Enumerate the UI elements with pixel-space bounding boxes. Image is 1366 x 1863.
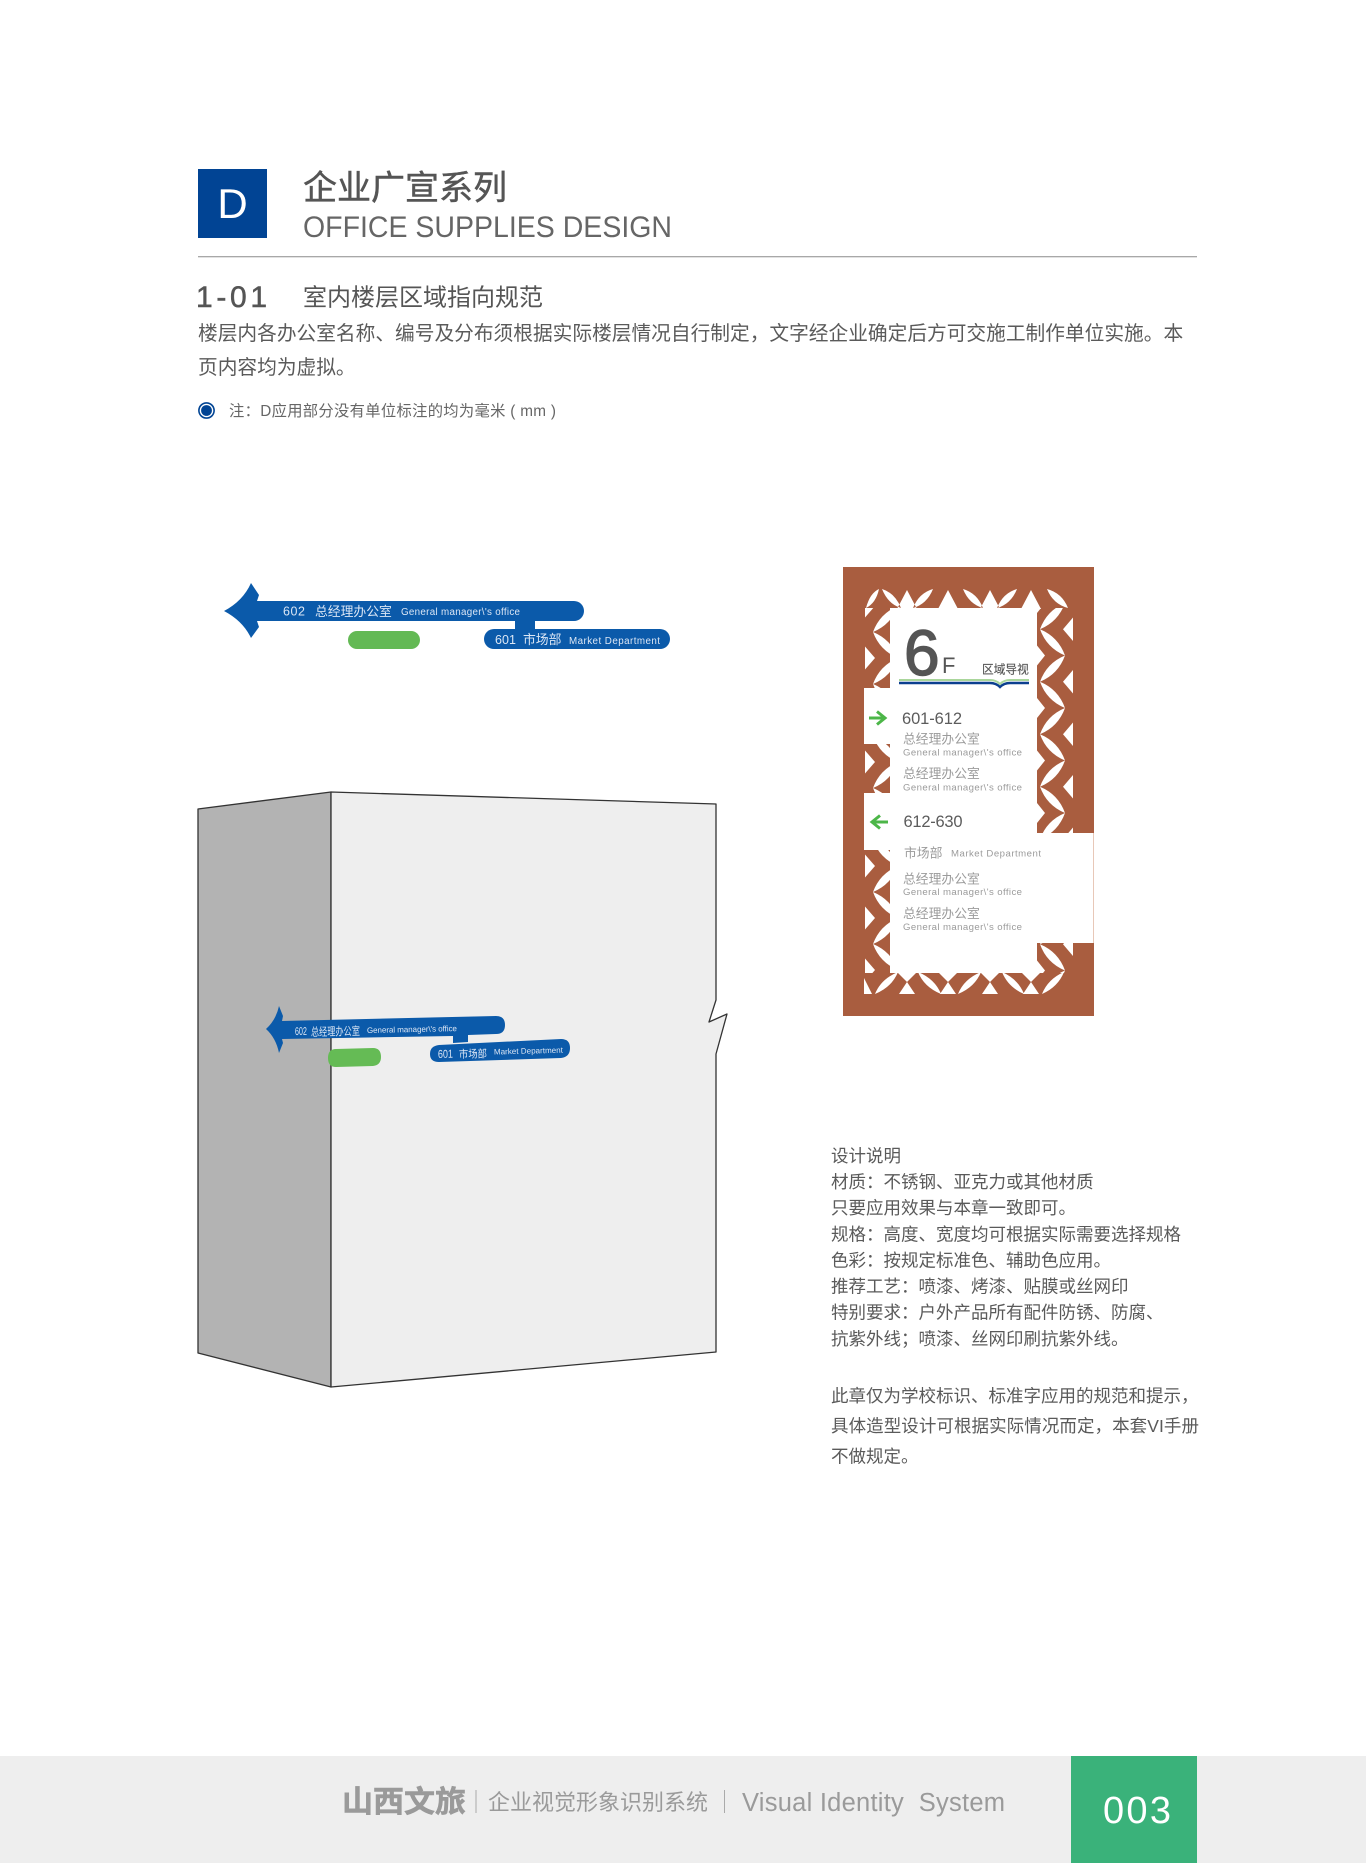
mounted labels: 市场部 <box>459 1046 487 1061</box>
description text: 页内容均为虚拟。 <box>198 357 356 379</box>
sign labels <box>283 604 660 647</box>
left and right cut-outs <box>864 688 1093 943</box>
sign labels: 601 <box>495 633 516 647</box>
floor number: 6 <box>904 617 940 689</box>
range 612-630: 612-630 <box>904 813 962 831</box>
sign labels: 市场部 <box>523 632 562 647</box>
room list upper: General manager\'s office <box>903 748 1022 758</box>
section badge D <box>198 169 267 238</box>
design notes: 特别要求：户外产品所有配件防锈、防腐、 <box>831 1302 1164 1322</box>
room list upper <box>903 732 1022 794</box>
footer band <box>0 1756 1366 1863</box>
mounted labels: 总经理办公室 <box>311 1024 360 1039</box>
section badge D: D <box>217 180 248 227</box>
design notes: 只要应用效果与本章一致即可。 <box>831 1198 1076 1218</box>
floor directory sign: F <box>942 653 955 678</box>
area guide label: 区域导视 <box>982 662 1029 676</box>
design notes: 抗紫外线；喷漆、丝网印刷抗紫外线。 <box>831 1329 1128 1349</box>
design notes: 材质：不锈钢、亚克力或其他材质 <box>831 1172 1094 1192</box>
directional sign: flat view <box>224 583 670 649</box>
mounted labels: 602 <box>295 1026 307 1038</box>
room list lower: 总经理办公室 <box>903 872 980 886</box>
room list upper: 总经理办公室 <box>903 766 980 781</box>
wall: left face <box>198 792 331 1387</box>
design notes <box>831 1146 1199 1466</box>
room list lower <box>903 846 1041 933</box>
sign frame <box>843 567 1094 1016</box>
heading: english title: OFFICE SUPPLIES DESIGN <box>303 211 672 244</box>
mounted arrow bar <box>266 1006 505 1053</box>
icon: green right arrow <box>869 712 885 724</box>
mounted labels <box>295 1024 564 1061</box>
design notes: 推荐工艺：喷漆、烤漆、贴膜或丝网印 <box>831 1276 1128 1296</box>
section title: 室内楼层区域指向规范 <box>303 284 543 312</box>
room list lower: Market Department <box>951 848 1041 860</box>
note with bullet: 注：D应用部分没有单位标注的均为毫米 ( mm ) <box>229 402 556 420</box>
room list lower: 市场部 <box>904 846 943 860</box>
sign labels: 总经理办公室 <box>315 604 392 619</box>
design notes: 不做规定。 <box>831 1446 918 1466</box>
room list upper: General manager\'s office <box>903 782 1022 794</box>
design notes: 色彩：按规定标准色、辅助色应用。 <box>831 1250 1111 1270</box>
design notes: 具体造型设计可根据实际情况而定，本套VI手册 <box>831 1416 1199 1436</box>
description text: 楼层内各办公室名称、编号及分布须根据实际楼层情况自行制定，文字经企业确定后方可交施工制作单位实施。本 <box>198 323 1183 345</box>
page number: 003 <box>1103 1790 1171 1832</box>
sign labels: 602 <box>283 604 305 618</box>
room list lower: General manager\'s office <box>903 922 1022 933</box>
heading: chinese title: 企业广宣系列 <box>303 170 507 208</box>
page number <box>1071 1756 1197 1863</box>
design notes: 此章仅为学校标识、标准字应用的规范和提示， <box>831 1386 1198 1406</box>
white content panel <box>890 608 1037 973</box>
green bar <box>348 631 420 649</box>
frame pattern <box>864 589 1073 994</box>
wall: right face <box>331 792 727 1387</box>
footer english name: Visual Identity System <box>742 1789 1005 1817</box>
room list upper: 总经理办公室 <box>903 732 980 746</box>
mounted green bar <box>328 1048 381 1067</box>
design notes: 规格：高度、宽度均可根据实际需要选择规格 <box>831 1224 1181 1244</box>
sign labels: Market Department <box>569 636 660 647</box>
design notes: 设计说明 <box>831 1146 901 1166</box>
mounted labels: General manager\'s office <box>367 1024 458 1035</box>
range 601-612: 601-612 <box>902 710 962 728</box>
mounted labels: 601 <box>438 1049 453 1061</box>
floor directory sign <box>843 567 1094 1016</box>
room list lower: General manager\'s office <box>903 887 1022 898</box>
mounted labels: Market Department <box>494 1046 564 1056</box>
arrow bar 602 <box>224 583 584 638</box>
icon: green left arrow <box>872 816 888 828</box>
sign labels: General manager\'s office <box>401 607 521 618</box>
footer brand: 山西文旅 <box>342 1786 466 1819</box>
footer <box>0 1756 1366 1863</box>
description text <box>198 323 1183 379</box>
mounted bar 601 <box>430 1039 570 1062</box>
room list lower: 总经理办公室 <box>903 906 980 921</box>
wall mockup <box>198 792 727 1387</box>
bar 601 <box>484 629 670 649</box>
mounted sign <box>266 1006 570 1067</box>
footer system name: 企业视觉形象识别系统 <box>488 1790 708 1815</box>
section number: 1-01 <box>196 281 267 314</box>
title rule <box>899 680 1029 687</box>
